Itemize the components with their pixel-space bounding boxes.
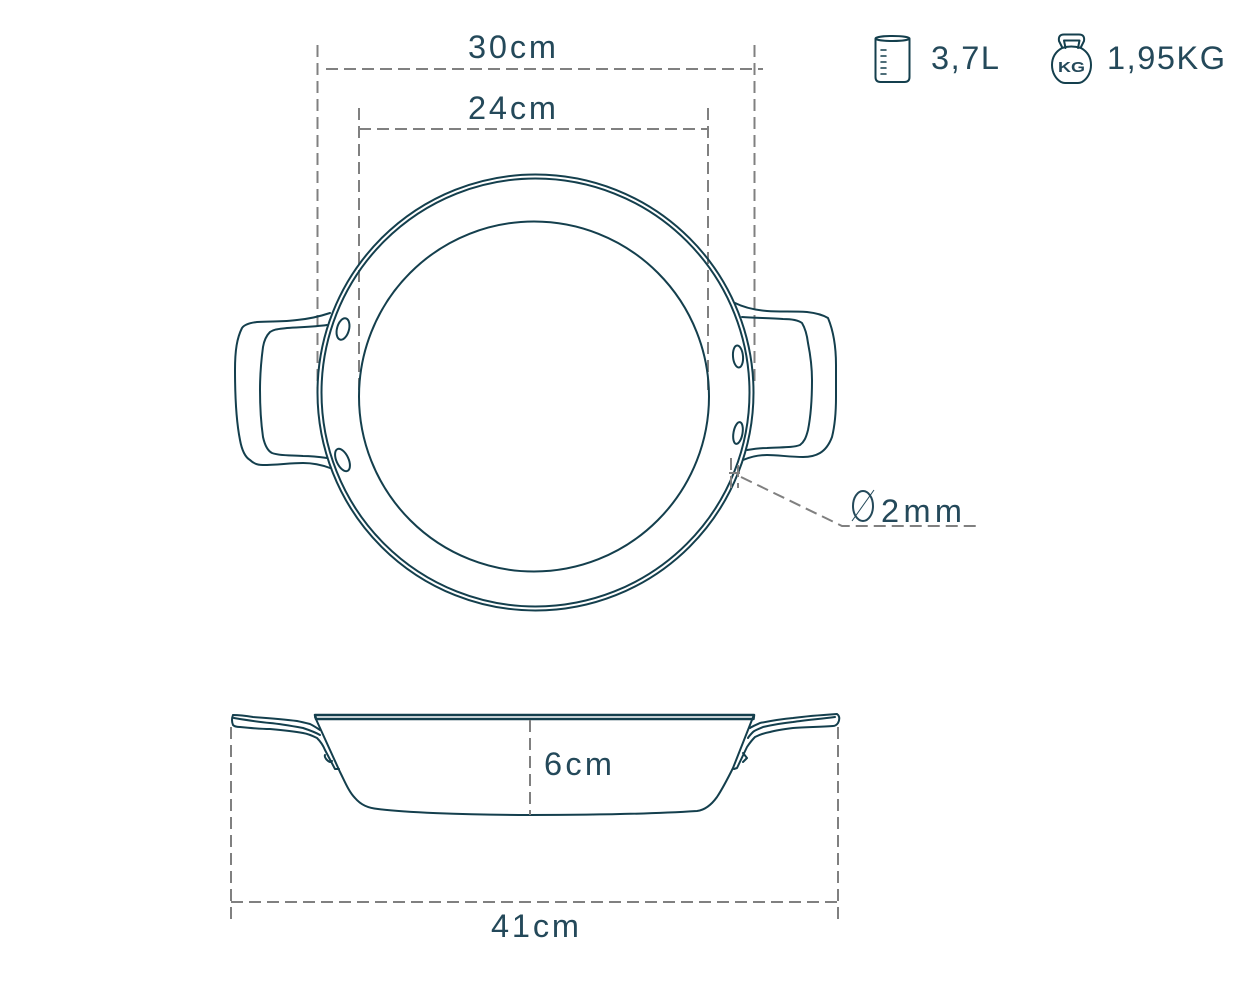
rivet holes bbox=[332, 317, 744, 473]
right rivet bbox=[743, 753, 747, 762]
pan base circle bbox=[359, 222, 709, 572]
capacity label: 3,7L bbox=[931, 40, 999, 76]
callout: 2mm rivet diameter bbox=[729, 458, 977, 529]
icon: measuring beaker bbox=[876, 36, 910, 82]
icon: kettlebell bbox=[1052, 34, 1091, 83]
rim outer circle bbox=[318, 174, 754, 610]
body bbox=[315, 716, 754, 815]
dimension: 30cm outer diameter: 30cm bbox=[468, 29, 556, 65]
right handle bbox=[734, 714, 839, 769]
rim inner circle bbox=[322, 178, 750, 606]
callout: 2mm rivet diameter: 2mm bbox=[881, 493, 962, 529]
dimension: 6cm height: 6cm bbox=[544, 746, 612, 782]
left handle bbox=[235, 313, 330, 468]
dimension: 41cm total width bbox=[231, 727, 838, 944]
top view of pan bbox=[235, 174, 836, 610]
side view of pan bbox=[232, 714, 839, 815]
left rivet bbox=[325, 755, 332, 762]
icon: kettlebell: KG bbox=[1058, 59, 1085, 76]
dimension: 24cm inner diameter: 24cm bbox=[468, 90, 556, 126]
dimension: 6cm height bbox=[530, 720, 612, 815]
rim bbox=[315, 715, 754, 719]
right handle bbox=[735, 303, 836, 460]
dimension: 41cm total width: 41cm bbox=[491, 908, 579, 944]
dimension: 30cm outer diameter bbox=[318, 29, 763, 393]
weight label: 1,95KG bbox=[1107, 40, 1225, 76]
left handle bbox=[232, 715, 339, 769]
dimension: 24cm inner diameter bbox=[359, 90, 708, 392]
